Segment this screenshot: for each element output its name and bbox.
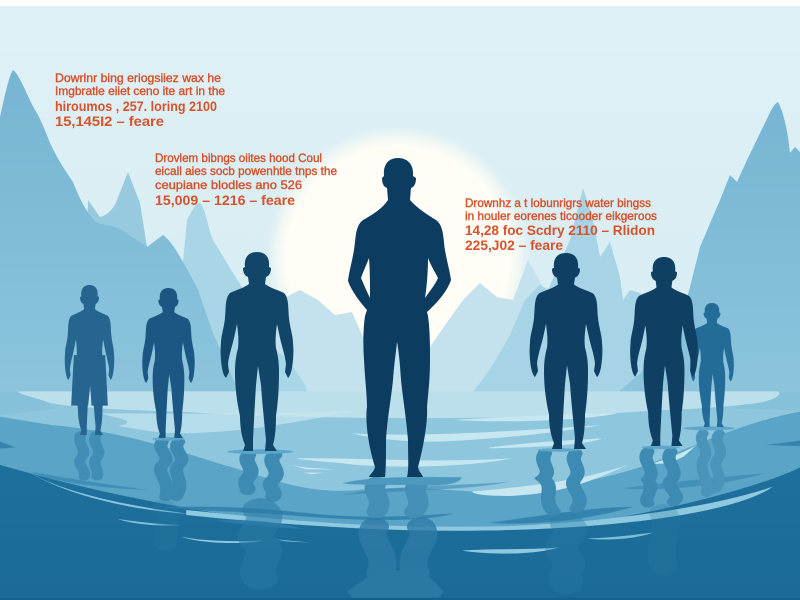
figure 3 [221,252,293,451]
water: dark streaks [0,441,800,529]
text block: middle callout: Drovlem bibngs oiites hood Coul [155,151,322,165]
figure 1: shorts [71,355,108,406]
text block: left callout: Imgbratle eiiet ceno ite art in the [55,84,225,98]
reflection: figure 2 [161,442,182,543]
text block: middle callout [155,151,337,208]
mountains: left range [0,70,308,395]
water [0,391,800,600]
text block: right callout: in houler eorenes ticooder eikgeroos [465,209,657,223]
bottom edge strip [0,598,800,600]
text block: right callout: 225,J02 – feare [465,238,563,253]
text block: left callout: Dowrlnr bing eriogsiiez wax he [55,71,221,85]
mountains: right range [615,102,800,395]
text block: left callout: 15,145I2 – feare [55,114,165,129]
water: side shading [0,392,56,415]
figure 1: far left [65,285,114,435]
reflection: figure 3 [246,455,276,578]
mountains: pale background range [215,188,670,395]
reflection: figure 1 [80,435,99,477]
figure 2 [142,288,195,438]
text block: middle callout: 15,009 – 1216 – feare [155,193,296,208]
text block: right callout [465,196,657,253]
water: foot shadow of centre figure [342,477,462,486]
reflection: figure 5 [543,453,580,583]
figure 7: far right, behind [690,303,734,427]
figure 5 [530,253,602,449]
water: light ripples [26,411,773,554]
text block: middle callout: eicall aies socb powenhtle tnps the [155,164,337,178]
reflection: centre figure [347,483,444,598]
sun [263,123,533,393]
water: contact shadows at feet [152,426,735,454]
water: deep base [0,397,800,600]
text block: right callout: 14,28 foc Scdry 2110 – Rlidon [465,223,655,238]
water: pale horizon pool [18,391,780,418]
text block: right callout: Drownhz a t lobunrigrs water bingss [465,196,651,210]
text block: left callout [55,71,225,129]
water: middle band [0,393,800,531]
text block: middle callout: ceupiane blodles ano 526 [155,178,302,192]
water: shallow band [0,393,800,493]
figure 6 [630,257,698,446]
reflection: figure 6 [646,452,676,567]
reflection: figure 7 [701,433,720,493]
text block: left callout: hiroumos , 257. loring 2100 [55,99,217,114]
centre figure [348,158,451,477]
